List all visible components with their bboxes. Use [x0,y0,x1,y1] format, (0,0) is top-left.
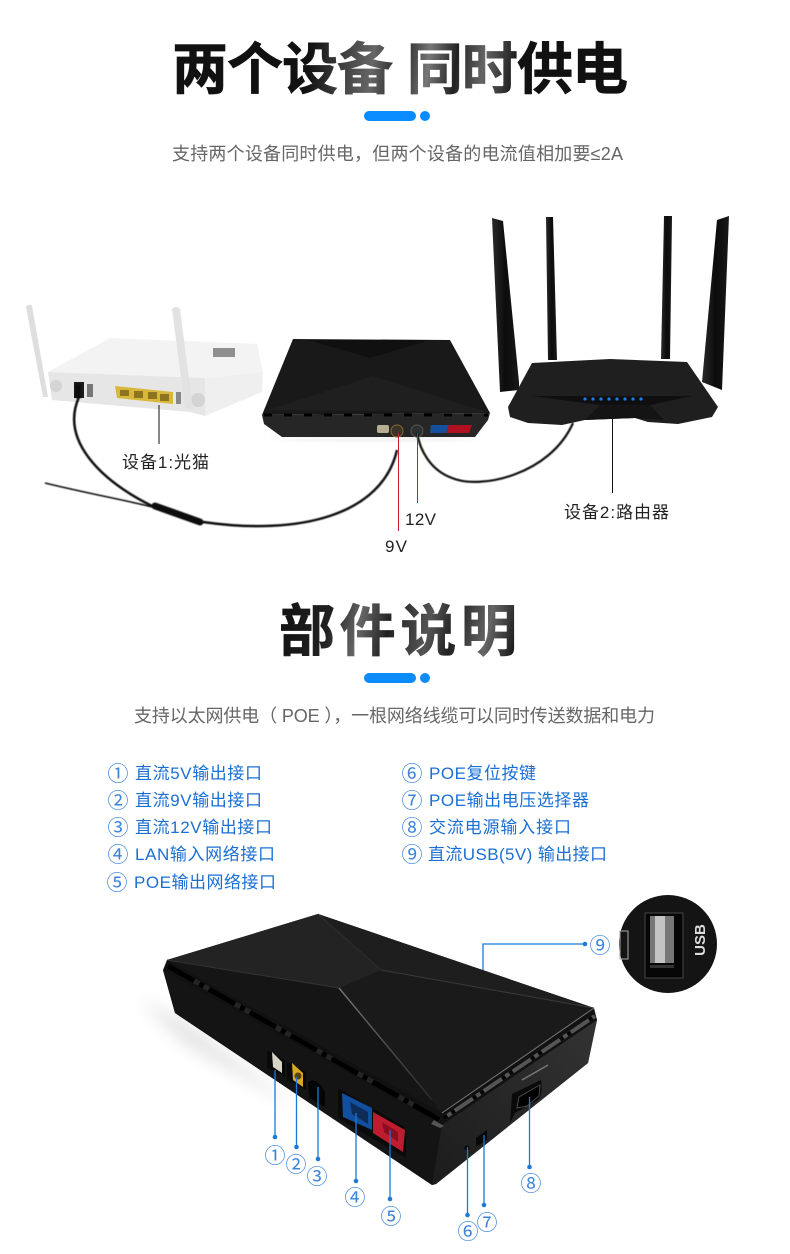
legend: left column: ⑤ [106,867,128,897]
legend: left column: LAN输入网络接口 [135,845,275,864]
title: two devices powered at once: 两个设备 同时供电 [172,38,628,101]
callout lines and numbers: ⑥ [458,1216,478,1246]
legend: right column: ⑨ [402,839,422,869]
callout lines and numbers: ① [264,1140,286,1170]
legend: left column: 直流9V输出接口 [135,791,262,810]
subtitle: POE note: 支持以太网供电（ POE ），一根网络线缆可以同时传送数据和电力 [134,702,655,728]
icon: optical modem [26,305,263,416]
legend: right column: POE复位按键 [429,764,536,783]
title accent bar [364,673,430,683]
callout lines and numbers: ⑤ [380,1201,402,1231]
label: device 2 router: 设备2:路由器 [564,503,669,522]
title: component description: 部件说明 [279,600,517,663]
product diagram: labelled power box [140,895,717,1246]
callout lines and numbers: ② [286,1149,306,1179]
legend: right column: 直流USB(5V) 输出接口 [428,845,607,864]
legend: right column: ⑦ [402,785,422,815]
inset: USB port detail [619,895,717,993]
legend: left column [106,758,276,897]
legend: left column: 直流12V输出接口 [135,818,272,837]
legend: right column: ⑥ [402,758,422,788]
callout lines and numbers [264,930,610,1246]
leader line: device 2 [612,418,614,493]
label: 12V: 12V [405,510,437,529]
diagram: two devices connected to the power box [26,216,729,556]
title accent bar [364,111,430,121]
leader line: device 1 [158,405,160,444]
callout lines and numbers: ⑨ [590,930,610,960]
legend: right column: POE输出电压选择器 [429,791,589,810]
legend: left column: ④ [108,839,128,869]
shadow under power box [275,435,475,441]
legend: left column: POE输出网络接口 [134,873,276,892]
callout lines and numbers: ③ [306,1161,328,1191]
ports on the box [267,1050,548,1158]
shadow behind box [140,1000,300,1110]
legend: right column: ⑧ [402,812,422,842]
legend: left column: ③ [108,812,128,842]
leader line: 12V [416,433,418,503]
icon: wifi router [492,216,729,425]
callout lines and numbers: ⑧ [520,1168,542,1198]
callout lines and numbers: ④ [344,1182,366,1212]
legend: right column: 交流电源输入接口 [429,818,571,837]
legend: left column: 直流5V输出接口 [135,764,262,783]
callout lines and numbers: ⑦ [476,1207,498,1237]
legend: right column [402,758,607,869]
legend: left column: ① [108,758,128,788]
legend: left column: ② [108,785,128,815]
subtitle: current limit note: 支持两个设备同时供电，但两个设备的电流值相加要≤2A [172,140,623,166]
cables [45,384,573,526]
icon: power box [262,339,490,437]
label: device 1 modem: 设备1:光猫 [122,453,209,472]
leader line: 9V [398,433,400,531]
icon: power box body [163,914,597,1185]
inset: USB port detail: USB [692,924,709,956]
label: 9V: 9V [385,537,408,556]
